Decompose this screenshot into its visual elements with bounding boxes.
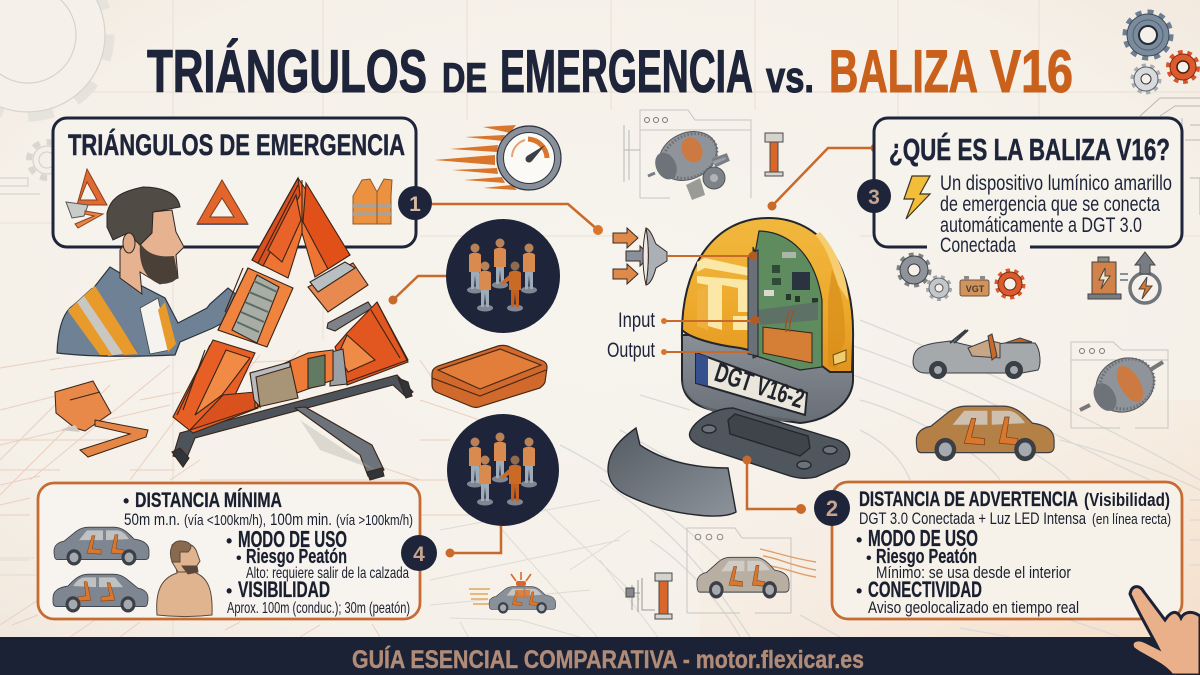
description text: automáticamente a DGT 3.0 bbox=[940, 214, 1142, 237]
title: TRIÁNGULOS bbox=[147, 38, 427, 105]
car: orange SUV bbox=[916, 406, 1054, 461]
panel: ¿qué es la baliza V16? bbox=[857, 118, 1182, 257]
visibilidad bbox=[226, 577, 410, 617]
icon: people circle top bbox=[446, 219, 560, 333]
mounting plate bbox=[690, 408, 850, 478]
icon: people circle bottom bbox=[447, 414, 559, 526]
decorative gears top left bbox=[0, 0, 110, 194]
distancia mínima: 100m min. bbox=[270, 510, 332, 529]
icon: lightning bolt bbox=[904, 176, 930, 219]
right lower piece bbox=[330, 302, 408, 386]
modo de uso: • bbox=[866, 550, 872, 567]
panel 4: datos triángulos bbox=[38, 483, 420, 619]
modo de uso: Mínimo: se usa desde el interior bbox=[876, 563, 1071, 582]
modo de uso: • bbox=[856, 530, 862, 550]
distancia mínima: (vía <100km/h), bbox=[184, 512, 266, 529]
dome bbox=[682, 218, 853, 372]
title: BALIZA bbox=[829, 38, 978, 105]
step 2 marker: 2 bbox=[826, 496, 838, 521]
visibilidad: • bbox=[226, 581, 232, 601]
folded triangle part on floor bbox=[55, 381, 148, 457]
step 2 marker bbox=[814, 490, 850, 526]
panel 2: datos baliza bbox=[814, 482, 1182, 619]
beacon baliza V16 bbox=[682, 218, 853, 423]
modo de uso: Riesgo Peatón bbox=[246, 546, 347, 568]
icon: gears top right bbox=[1126, 13, 1197, 92]
icon: small car with warning light bbox=[469, 572, 556, 614]
license plate bbox=[696, 353, 808, 415]
distancia mínima: DISTANCIA MÍNIMA bbox=[135, 489, 282, 512]
beacon connector lines with labels bbox=[607, 252, 760, 362]
icon: safety vest bbox=[353, 179, 392, 224]
reflective vest bbox=[68, 288, 138, 356]
detached gray cover bbox=[608, 428, 736, 516]
icon: battery equals power bbox=[1088, 252, 1160, 303]
conectividad bbox=[856, 577, 1079, 617]
person with safety vest bbox=[57, 187, 238, 356]
motor schematic top bbox=[624, 110, 751, 200]
hair bbox=[107, 187, 180, 245]
distancia mínima: (vía >100km/h) bbox=[336, 512, 413, 529]
visibilidad: Aprox. 100m (conduc.); 30m (peatón) bbox=[227, 600, 410, 617]
distancia mínima bbox=[123, 489, 413, 529]
beard bbox=[140, 243, 178, 284]
title: EMERGENCIA bbox=[500, 38, 753, 105]
distancia de advertencia: DISTANCIA DE ADVERTENCIA bbox=[859, 488, 1078, 511]
modo de uso: • bbox=[226, 531, 232, 551]
conectividad: • bbox=[856, 581, 862, 601]
bottom bar bbox=[250, 350, 333, 408]
title: V16 bbox=[990, 38, 1073, 105]
car schematic window bbox=[687, 528, 816, 613]
face bbox=[120, 210, 184, 294]
connector to crowd circle bbox=[388, 276, 450, 304]
person silhouette bbox=[157, 541, 212, 616]
label input: Input bbox=[618, 309, 655, 332]
shirt bbox=[140, 298, 170, 354]
description text: Conectada bbox=[940, 234, 1016, 257]
icon: coil top bbox=[765, 133, 783, 176]
modo de uso bbox=[226, 526, 409, 582]
step 3 marker bbox=[857, 179, 891, 213]
step 3 marker: 3 bbox=[868, 186, 880, 209]
right box bbox=[308, 262, 372, 331]
motor schematic right bbox=[1071, 342, 1168, 428]
modo de uso: Riesgo Peatón bbox=[876, 546, 977, 568]
icon: speedometer with speed lines bbox=[434, 125, 561, 190]
step 4 marker bbox=[401, 535, 437, 571]
connector to step 4 bbox=[446, 524, 501, 558]
step 1 marker and connector bbox=[398, 186, 603, 235]
LED array bbox=[697, 258, 750, 330]
car: convertible bbox=[913, 330, 1040, 378]
connector beacon to panel 3 bbox=[768, 144, 880, 210]
title: vs. bbox=[766, 53, 814, 102]
visibilidad: VISIBILIDAD bbox=[238, 577, 330, 602]
panel: triángulos de emergencia bbox=[53, 118, 416, 247]
description text bbox=[940, 172, 1172, 257]
title bbox=[147, 38, 1073, 105]
base bbox=[682, 335, 853, 423]
distancia de advertencia: (en línea recta) bbox=[1092, 511, 1171, 528]
conectividad: Aviso geolocalizado en tiempo real bbox=[868, 598, 1079, 617]
held piece bbox=[218, 268, 293, 347]
body bbox=[57, 267, 238, 356]
footer text: GUÍA ESENCIAL COMPARATIVA - motor.flexicar.es bbox=[352, 645, 864, 674]
distancia mínima: • bbox=[123, 491, 129, 511]
modo de uso: • bbox=[236, 550, 242, 567]
segmented warning triangle on stand bbox=[172, 178, 413, 480]
icon: gears and VGT battery bbox=[899, 255, 1023, 299]
icon: coil bottom with schematic bbox=[626, 573, 672, 619]
distancia mínima: 50m m.n. bbox=[124, 510, 180, 529]
panel heading: TRIÁNGULOS DE EMERGENCIA bbox=[68, 128, 405, 162]
step 4 marker: 4 bbox=[413, 543, 425, 566]
icon: triangle bbox=[197, 180, 248, 224]
license plate: DGT V16-2 bbox=[711, 357, 808, 414]
icon: small folded triangle bbox=[66, 169, 107, 228]
modo de uso: MODO DE USO bbox=[238, 526, 347, 552]
icon: pointing hand bbox=[1130, 587, 1200, 675]
stand bbox=[172, 375, 413, 480]
distancia de advertencia: (Visibilidad) bbox=[1084, 490, 1170, 510]
input arrows and lens bbox=[613, 228, 667, 285]
distancia de advertencia: DGT 3.0 Conectada + Luz LED Intensa bbox=[859, 509, 1086, 528]
modo de uso: Alto: requiere salir de la calzada bbox=[246, 565, 409, 582]
bottom left piece bbox=[173, 340, 258, 433]
modo de uso bbox=[856, 525, 1071, 582]
top piece bbox=[252, 178, 350, 278]
label output: Output bbox=[607, 339, 655, 362]
modo de uso: MODO DE USO bbox=[868, 525, 978, 551]
side latch bbox=[833, 350, 846, 365]
icon: orange case bbox=[432, 345, 547, 408]
conectividad: CONECTIVIDAD bbox=[868, 577, 982, 602]
title: DE bbox=[442, 54, 487, 101]
step 1 marker and connector: 1 bbox=[409, 193, 421, 216]
battery bbox=[763, 327, 812, 363]
distancia de advertencia bbox=[859, 488, 1171, 528]
cars bbox=[53, 527, 149, 612]
connector beacon to step 2 bbox=[742, 456, 806, 514]
icon: gears and VGT battery: VGT bbox=[966, 284, 985, 294]
footer bar bbox=[0, 637, 1200, 675]
circuit board bbox=[753, 231, 822, 370]
frame edge bbox=[753, 247, 758, 358]
